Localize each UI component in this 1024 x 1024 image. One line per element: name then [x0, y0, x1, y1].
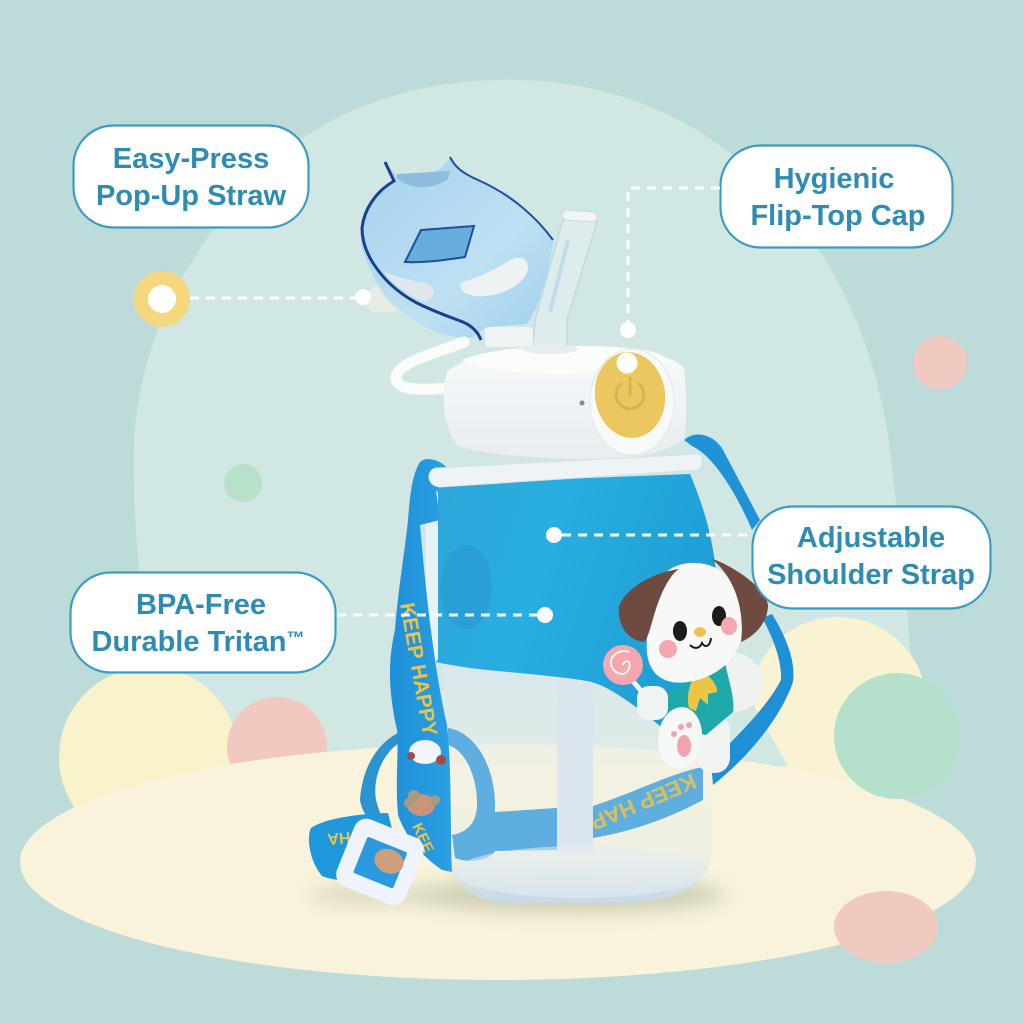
paw pad: [671, 722, 692, 757]
label box: [752, 506, 990, 608]
label box: [720, 146, 952, 248]
lower strap text: HA: [326, 828, 351, 847]
shoulder strap behind bottle: [309, 434, 793, 880]
connector: flip-top cap: [620, 188, 720, 338]
charm arm left: [637, 686, 668, 720]
sleeve side bump: [440, 545, 492, 629]
marker core: [148, 285, 176, 313]
charm shirt: [662, 663, 733, 735]
yellow marker: [134, 271, 190, 327]
cheeks: [659, 617, 737, 658]
label text line two: Flip-Top Cap: [750, 200, 926, 232]
button marker dot: [616, 352, 638, 374]
charm leg right: [697, 715, 730, 773]
dashed line: [190, 296, 355, 300]
lid top slot: [397, 171, 450, 187]
end dot: [546, 527, 562, 543]
lid right rim: [450, 157, 553, 240]
carry loop: [396, 342, 464, 389]
strap text: KEEP HAPPY: [395, 601, 441, 738]
bear print: [371, 845, 407, 878]
charm arm right: [725, 652, 763, 712]
straw inner channel: [550, 240, 568, 312]
end dot: [620, 322, 636, 338]
label text line two: Durable Tritan: [92, 626, 286, 658]
straw tip: [562, 210, 597, 222]
cap rivet: [580, 400, 584, 406]
decorative ellipse: bottom pink: [834, 891, 938, 963]
left strap with KEEP HAPPY print: [326, 459, 452, 872]
adjustment buckle: [332, 815, 428, 909]
connector: pop-up straw: [134, 271, 371, 327]
callout: pop-up straw: [74, 126, 308, 228]
label text: Easy-Press: [113, 143, 269, 175]
strap shadow: [310, 885, 430, 905]
connector: tritan: [337, 607, 553, 623]
white cap: [444, 344, 686, 459]
pop-up straw: [533, 210, 597, 346]
label text line two: Pop-Up Straw: [96, 180, 286, 212]
ribbon: [688, 672, 717, 711]
label text: Adjustable: [797, 522, 945, 554]
lid pad left: [384, 271, 434, 302]
white neck ring: [429, 454, 702, 487]
charm foot: [655, 705, 705, 771]
blue silicone sleeve: [426, 474, 718, 726]
callout: flip-top cap: [720, 146, 952, 248]
ground ellipse: [20, 744, 976, 980]
inner straw: [557, 670, 593, 852]
label box: [74, 126, 308, 228]
dashed line: [562, 534, 752, 536]
dashed line: [337, 614, 537, 616]
callout: tritan: [70, 572, 336, 672]
ear right: [712, 559, 768, 642]
decorative circle: left yellow: [59, 667, 239, 847]
decorative circle: small green: [224, 464, 262, 502]
cap top face: [462, 346, 664, 374]
dome wedge over cream circle: [700, 690, 788, 772]
flip-top lid: [361, 157, 553, 340]
lid pad right: [460, 258, 528, 296]
lollipop swirl: [611, 651, 630, 674]
label text: BPA-Free: [136, 589, 266, 621]
dashed line: [628, 188, 720, 322]
decorative circle: left pink: [227, 697, 327, 797]
lid tab behind rim: [365, 285, 397, 313]
buckle window: [353, 837, 408, 889]
hinge bridge: [485, 327, 533, 347]
decorative circle: top right pink: [913, 336, 967, 390]
connector: shoulder strap: [546, 527, 752, 543]
bottle base highlights: [455, 846, 705, 898]
strap seen through bottle: [448, 728, 703, 861]
decorative circle: right green: [834, 673, 960, 799]
charm head: [647, 563, 743, 683]
bottle shadow: [415, 877, 725, 913]
decorative circle: right cream: [749, 617, 927, 795]
lollipop stick: [632, 680, 652, 704]
label box: [70, 572, 336, 672]
ear left: [619, 569, 679, 642]
strap text lower: KEE: [408, 821, 437, 856]
button recess: [590, 349, 674, 455]
lollipop: [603, 645, 643, 685]
lid window: [405, 226, 474, 262]
mouth: [690, 638, 711, 648]
end dot: [355, 289, 371, 305]
strap print: bear: [404, 790, 440, 816]
power icon: [616, 378, 644, 409]
straw base: [522, 344, 578, 354]
eyes: [673, 606, 726, 641]
background dome shape: [134, 80, 912, 770]
label text line two: ™: [286, 628, 304, 648]
callout: shoulder strap: [752, 506, 990, 608]
label text line two: Shoulder Strap: [767, 559, 975, 591]
puppy charm: [603, 559, 768, 773]
end dot: [537, 607, 553, 623]
label text: Hygienic: [774, 163, 894, 195]
clear Tritan bottle body: [441, 650, 712, 903]
strap print: bird: [407, 740, 446, 765]
strap text through bottle: KEEP HAP: [587, 768, 700, 835]
sleeve white stripe: [426, 490, 438, 662]
yellow button: [589, 348, 671, 442]
nose: [694, 627, 706, 637]
lid dark rim: [362, 162, 481, 340]
